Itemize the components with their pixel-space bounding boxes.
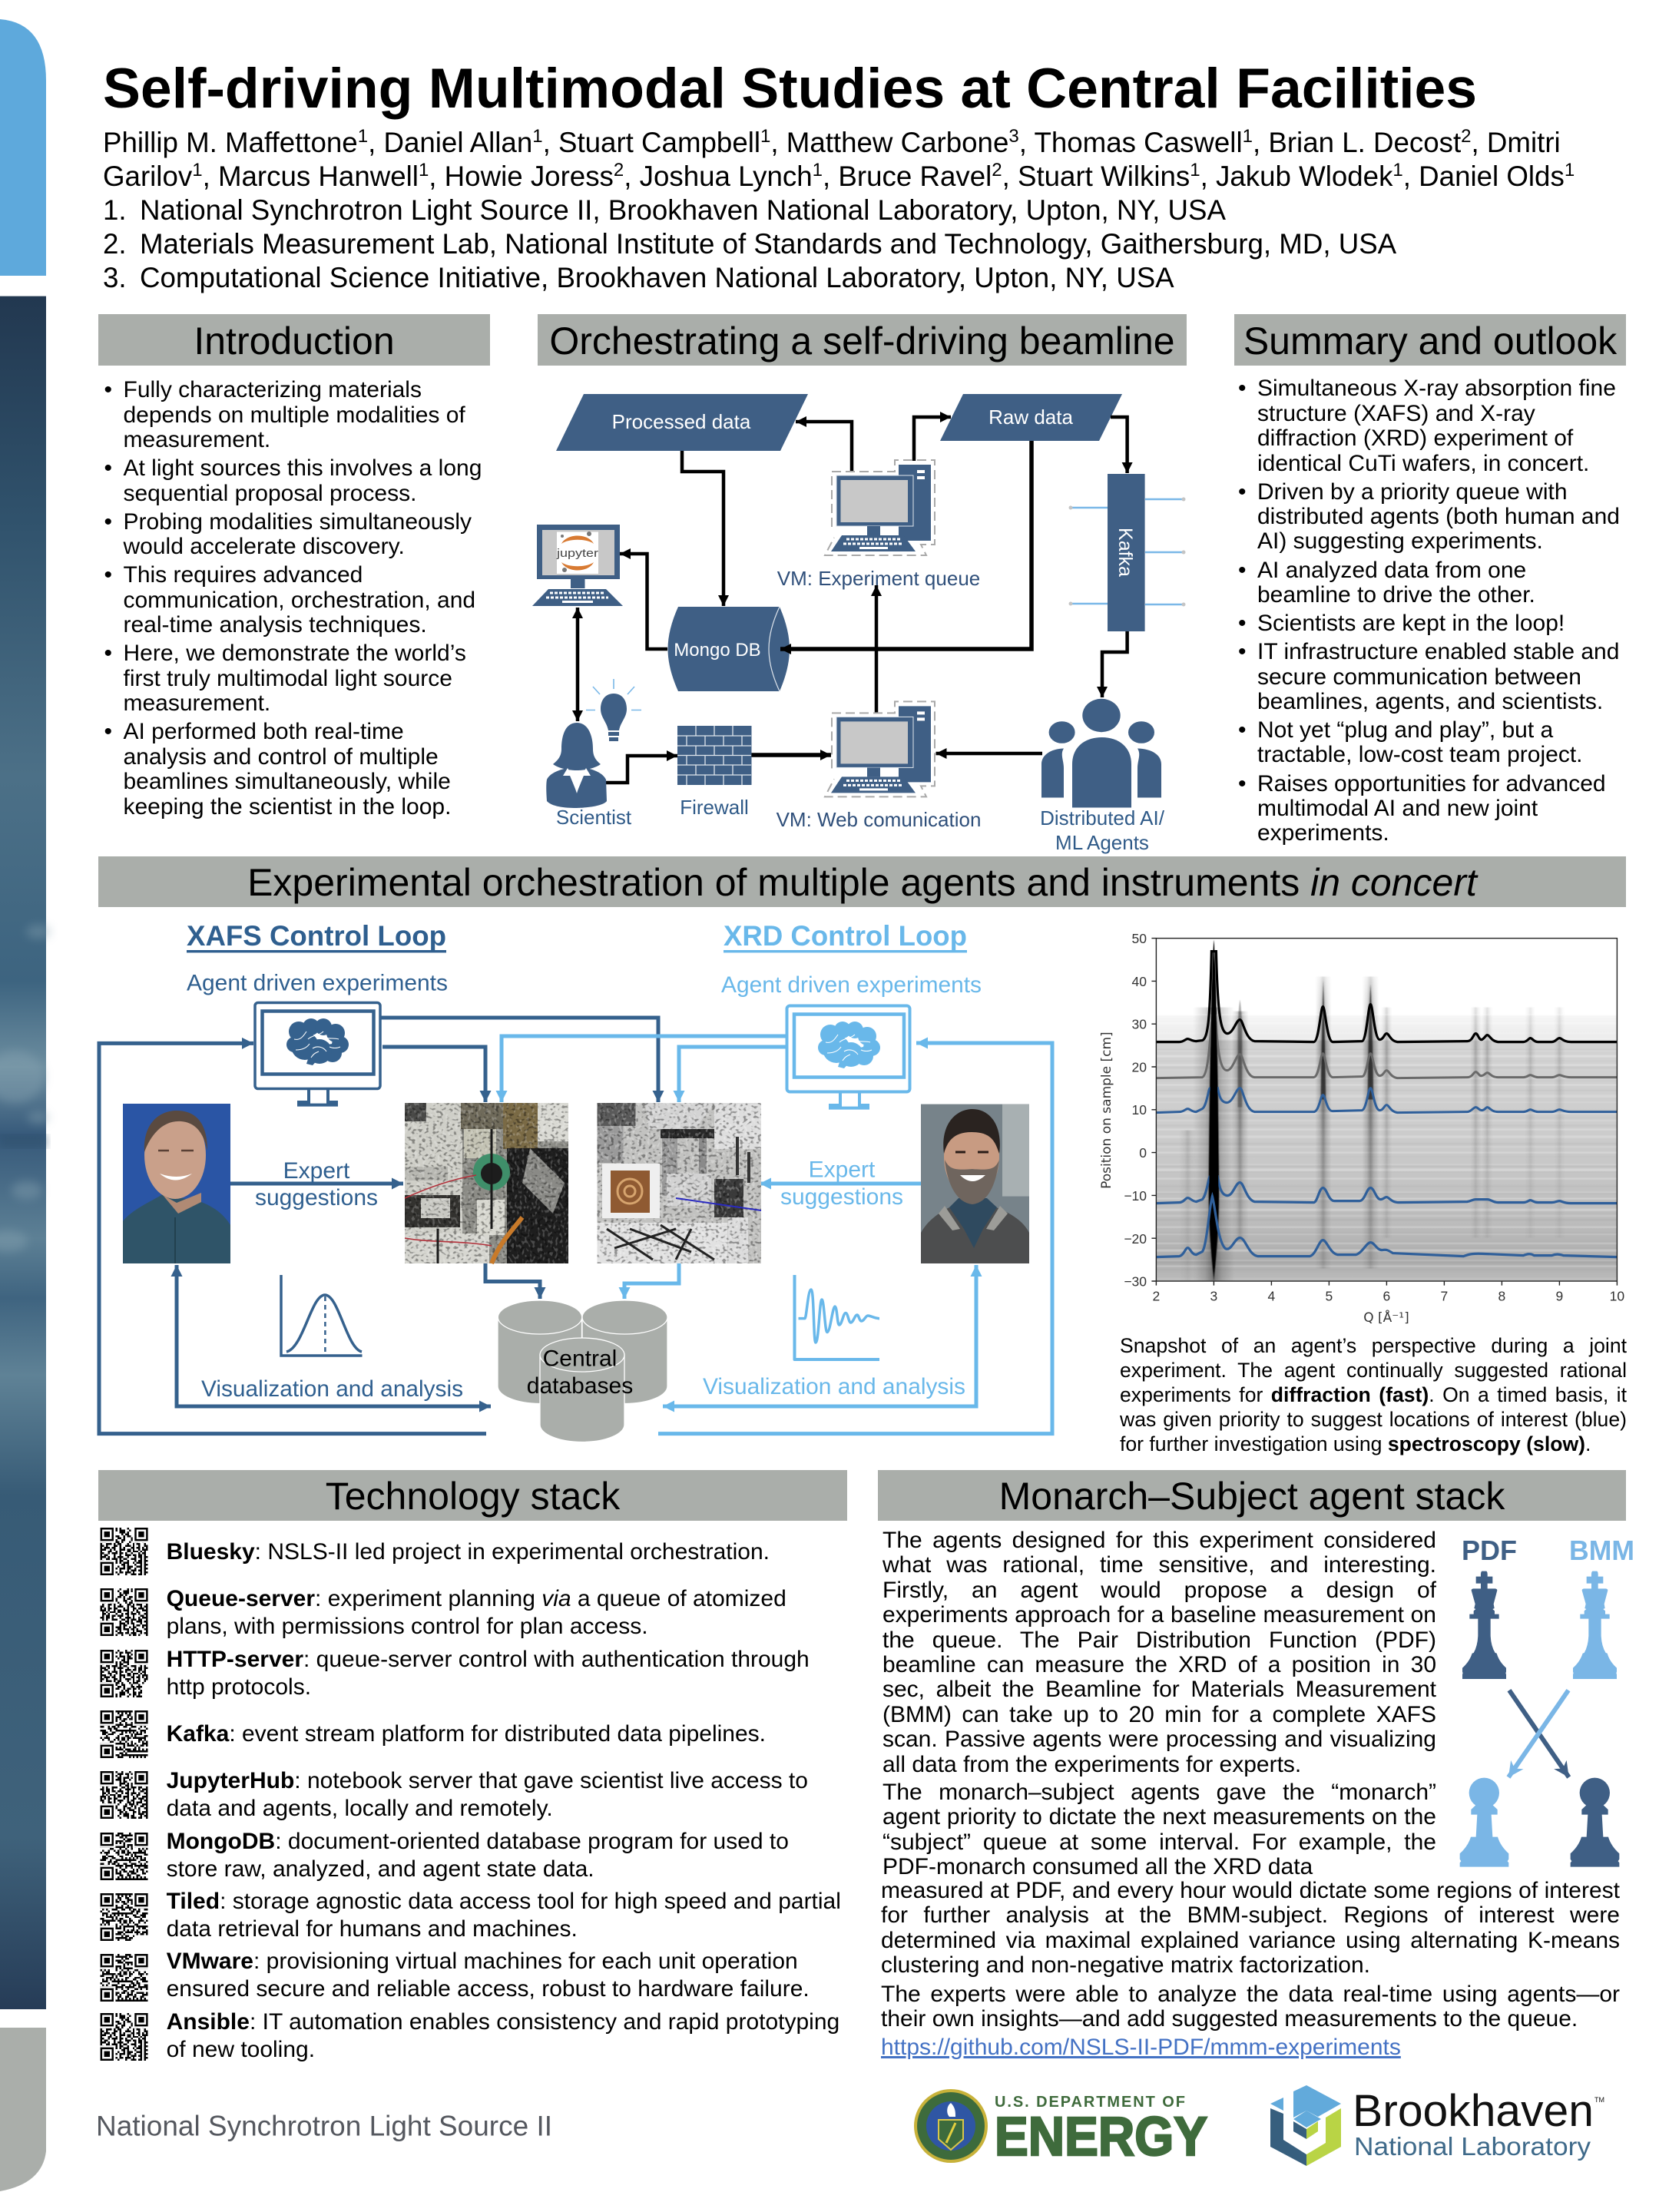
label: BMM: BMM (1569, 1535, 1634, 1566)
introduction bullet list (104, 377, 482, 820)
icon: jupyter workstation (532, 525, 623, 606)
chart: x tick labels: 10 (1610, 1289, 1624, 1304)
DOE wordmark large: ENERGY (995, 2107, 1207, 2167)
introduction bullet list: real-time analysis techniques. (123, 612, 427, 637)
chart caption: experiment. The agent continually suggested rational (1120, 1359, 1627, 1382)
National Laboratory wordmark: National Laboratory (1354, 2132, 1591, 2161)
arrow: BMM to subject (1508, 1690, 1568, 1777)
heading: XAFS control loop: XAFS Control Loop (187, 920, 446, 952)
photo: XRD instrument (598, 1103, 761, 1263)
chess graphic: monarch subject (1460, 1535, 1634, 1867)
connector arrows (578, 417, 1128, 783)
raw data node: Raw data (988, 406, 1073, 429)
chart axes frame (1151, 939, 1617, 1286)
introduction bullet list: At light sources this involves a long (123, 455, 482, 481)
monarch-subject body text: for further analysis at the BMM-subject. Regions of interest were (881, 1902, 1620, 1928)
kafka stream bus (1069, 474, 1186, 631)
heading: technology stack: Technology stack (326, 1475, 620, 1518)
text: • (1238, 611, 1247, 636)
sidebar: bottom gray tab (0, 2028, 46, 2191)
summary bullet list: diffraction (XRD) experiment of (1257, 426, 1573, 451)
QR code: Bluesky (101, 1528, 148, 1575)
label: expert suggestions right: suggestions (780, 1184, 903, 1210)
chart: y tick labels: −10 (1124, 1188, 1147, 1204)
label: web communication: VM: Web comunication (777, 808, 981, 831)
tech item: HTTP-server: http protocols. (167, 1674, 311, 1700)
heading: XRD control loop: XRD Control Loop (724, 920, 967, 952)
heading: introduction: Introduction (194, 320, 395, 363)
text: • (1238, 639, 1247, 664)
heading: technology stack (98, 1470, 847, 1521)
introduction bullet list: Here, we demonstrate the world’s (123, 641, 466, 666)
tech item: VMware: VMware: provisioning virtual machines for each unit operation (167, 1949, 798, 1974)
curve: gray trace (1156, 1023, 1617, 1078)
summary bullet list: beamline to drive the other. (1257, 582, 1535, 608)
QR code: Tiled (101, 1893, 148, 1941)
monarch-subject body text: “subject” queue at some interval. For example, the (882, 1830, 1436, 1855)
raw data node (940, 394, 1122, 441)
chart: y tick labels: 10 (1132, 1102, 1147, 1118)
monarch-subject body text: beamline can measure the XRD of a position in 30 (882, 1652, 1436, 1677)
introduction bullet list: sequential proposal process. (123, 481, 416, 506)
tech item: Ansible (167, 2009, 839, 2062)
chart: x tick labels: 2 (1153, 1289, 1160, 1304)
icon: BMM king (1573, 1571, 1617, 1679)
monarch-subject body text: determined via maximal explained variance using alternating K-means (881, 1928, 1620, 1953)
chart: x tick labels (1153, 1289, 1624, 1304)
XRD loop arrows (502, 1036, 1052, 1434)
monarch-subject body text: (BMM) can take up to 20 min for a complete XAFS (882, 1702, 1436, 1727)
heading: orchestrating a self-driving beamline: Orchestrating a self-driving beamline (549, 320, 1175, 363)
curve: blue trace 1 (1156, 1088, 1617, 1113)
monarch-subject body text: scan. Passive agents were processing and visualizing (882, 1727, 1436, 1752)
summary bullet list: AI) suggesting experiments. (1257, 528, 1543, 554)
text: • (1238, 558, 1247, 583)
photo: XAFS instrument (405, 1103, 568, 1263)
chart: x tick labels: 6 (1383, 1289, 1390, 1304)
label: distributed AI agents: ML Agents (1055, 831, 1149, 854)
chart: y tick labels: −20 (1124, 1231, 1147, 1247)
chart: y tick labels: 40 (1132, 974, 1147, 989)
introduction bullet list: Fully characterizing materials (123, 377, 422, 402)
text: • (104, 641, 112, 666)
summary bullet list (1238, 376, 1620, 846)
summary bullet list: structure (XAFS) and X-ray (1257, 401, 1535, 426)
tech item: Tiled: Tiled: storage agnostic data access tool for high speed and partial (167, 1889, 841, 1914)
chart: y tick labels: 0 (1139, 1145, 1147, 1161)
chart caption: for further investigation using spectroscopy (slow). (1120, 1432, 1591, 1455)
authors and affiliations: Phillip M. Maffettone1, Daniel Allan1, Stuart Campbell1, Matthew Carbone3, Thomas Caswell1, Brian L. Decost2, Dmitri (103, 126, 1561, 158)
chart caption (1120, 1334, 1627, 1455)
processed data node: Processed data (612, 410, 751, 433)
monarch-subject body text: what was rational, time sensitive, and interesting. (882, 1552, 1436, 1578)
summary bullet list: secure communication between (1257, 664, 1581, 690)
label: firewall: Firewall (680, 796, 749, 819)
heading: experimental orchestration (98, 856, 1626, 907)
label: expert suggestions left (255, 1158, 378, 1210)
icon: damped oscillation plot (794, 1275, 879, 1359)
label: central databases: databases (527, 1373, 633, 1399)
label: distributed AI agents: Distributed AI/ (1040, 806, 1165, 830)
chart: y tick labels: 20 (1132, 1060, 1147, 1075)
authors and affiliations (103, 126, 1575, 293)
authors and affiliations: Garilov1, Marcus Hanwell1, Howie Joress2, Joshua Lynch1, Bruce Ravel2, Stuart Wilkins1, Jakub Wlodek1, Daniel Olds1 (103, 160, 1575, 192)
text: • (1238, 376, 1247, 401)
chart: x tick labels: 5 (1326, 1289, 1333, 1304)
chart: x tick labels: 4 (1268, 1289, 1276, 1304)
tech item: Queue-server: Queue-server: experiment planning via a queue of atomized (167, 1586, 786, 1611)
monarch-subject body text: their own insights—and add suggested measurements to the queue. (881, 2006, 1578, 2032)
tech item: HTTP-server (167, 1647, 810, 1700)
Brookhaven wordmark: Brookhaven (1353, 2086, 1594, 2136)
chart caption: was given priority to suggest locations of interest (blue) (1120, 1408, 1627, 1431)
processed data node (556, 394, 808, 451)
summary bullet list: distributed agents (both human and (1257, 504, 1620, 529)
heading: introduction (98, 314, 490, 366)
chart: y axis title: Position on sample [cm] (1099, 1031, 1114, 1189)
introduction bullet list: communication, orchestration, and (123, 588, 475, 613)
text: • (1238, 717, 1247, 743)
chart caption: experiments for diffraction (fast). On a timed basis, it (1120, 1383, 1627, 1406)
summary bullet list: tractable, low-cost team project. (1257, 742, 1583, 767)
label: expert suggestions right: Expert (809, 1157, 876, 1183)
summary bullet list: identical CuTi wafers, in concert. (1257, 451, 1589, 476)
chart caption: Snapshot of an agent’s perspective during a joint (1120, 1334, 1627, 1357)
chart: x tick labels: 3 (1210, 1289, 1217, 1304)
summary bullet list: AI analyzed data from one (1257, 558, 1526, 583)
icon: central databases (498, 1300, 667, 1442)
text: • (1238, 479, 1247, 505)
icon: lightbulb (586, 679, 641, 741)
summary bullet list: Not yet “plug and play”, but a (1257, 717, 1553, 743)
QR code: HTTP-server (101, 1650, 148, 1697)
monarch-subject body text: The agents designed for this experiment considered (882, 1528, 1436, 1553)
text: • (104, 455, 112, 481)
summary bullet list: Raises opportunities for advanced (1257, 771, 1606, 796)
authors and affiliations: 1. (103, 194, 127, 226)
summary bullet list: Scientists are kept in the loop! (1257, 611, 1565, 636)
summary bullet list: Simultaneous X-ray absorption fine (1257, 376, 1616, 401)
heading: summary and outlook: Summary and outlook (1243, 320, 1617, 363)
monarch-subject body text: https://github.com/NSLS-II-PDF/mmm-experiments (881, 2034, 1401, 2060)
mongo db cylinder (668, 607, 790, 691)
summary bullet list: experiments. (1257, 820, 1389, 846)
chart: y tick labels: 30 (1132, 1017, 1147, 1032)
mongo db cylinder: Mongo DB (674, 640, 761, 661)
logo: Brookhaven National Laboratory (1270, 2085, 1604, 2166)
QR code: JupyterHub (101, 1771, 148, 1819)
label: PDF: PDF (1462, 1535, 1517, 1566)
summary bullet list: beamlines, agents, and scientists. (1257, 689, 1603, 714)
tech item: JupyterHub (167, 1768, 808, 1821)
heading: monarch-subject agent stack (878, 1470, 1626, 1521)
label: agent driven experiments right: Agent driven experiments (721, 972, 982, 998)
sidebar: dark textured strip (0, 296, 51, 2009)
tech item: MongoDB: store raw, analyzed, and agent state data. (167, 1856, 594, 1882)
monarch-subject body text: Firstly, an agent would propose a design of (882, 1578, 1436, 1603)
heading: experimental orchestration: Experimental orchestration of multiple agents and instruments in concert (247, 861, 1477, 904)
chart: diffraction waterfall (1099, 931, 1624, 1326)
monarch-subject body text: PDF-monarch consumed all the XRD data (882, 1854, 1313, 1879)
chart: y tick labels (1124, 931, 1147, 1289)
icon: experiment queue VM (825, 460, 935, 555)
monarch-subject body text: The experts were able to analyze the data real-time using agents—or (881, 1982, 1620, 2006)
chart: x axis title: Q [Å⁻¹] (1363, 1309, 1409, 1326)
curve: blue trace 2 (1156, 1177, 1617, 1204)
tech item: Kafka: Kafka: event stream platform for distributed data pipelines. (167, 1721, 766, 1747)
label: distributed AI agents (1040, 806, 1165, 854)
label: central databases (527, 1346, 633, 1399)
introduction bullet list: This requires advanced (123, 562, 363, 588)
label: expert suggestions left: Expert (283, 1158, 350, 1184)
tech item: VMware: ensured secure and reliable access, robust to hardware failure. (167, 1976, 810, 2002)
photo: XRD expert (921, 1104, 1029, 1263)
introduction bullet list: analysis and control of multiple (123, 744, 439, 770)
text: • (104, 562, 112, 588)
introduction bullet list: measurement. (123, 690, 270, 716)
label: expert suggestions right (780, 1157, 903, 1210)
icon: XAFS agent monitor (255, 1003, 380, 1105)
tech item: HTTP-server: HTTP-server: queue-server control with authentication through (167, 1647, 810, 1672)
DOE seal (914, 2089, 988, 2163)
label: scientist: Scientist (556, 806, 632, 829)
authors and affiliations: Materials Measurement Lab, National Institute of Standards and Technology, Gaithersburg, MD, USA (140, 228, 1396, 260)
icon: PDF king (1462, 1571, 1506, 1679)
chart: x tick labels: 8 (1498, 1289, 1505, 1304)
panel: orchestration flow diagram (532, 394, 1186, 854)
tech item: Queue-server: plans, with permissions control for plan access. (167, 1614, 648, 1639)
trademark: TM (1594, 2096, 1604, 2104)
footer: NSLS-II wordmark: National Synchrotron Light Source II (96, 2111, 552, 2142)
QR code: Ansible (101, 2013, 148, 2061)
label: experiment queue: VM: Experiment queue (777, 567, 980, 590)
monarch-subject body text: experiments approach for a baseline measurement on (882, 1602, 1436, 1628)
icon: firewall (677, 726, 751, 785)
QR code: VMware (101, 1954, 148, 2002)
summary bullet list: multimodal AI and new joint (1257, 796, 1538, 821)
label: agent driven experiments left: Agent driven experiments (187, 971, 448, 995)
kafka stream bus: Kafka (1114, 528, 1136, 577)
Brookhaven hexagon mark (1270, 2085, 1341, 2166)
monarch-subject body text: sec, albeit the Beamline for Materials Measurement (882, 1677, 1436, 1702)
authors and affiliations: Computational Science Initiative, Brookhaven National Laboratory, Upton, NY, USA (140, 262, 1174, 293)
QR code: MongoDB (101, 1833, 148, 1880)
monarch-subject body text: measured at PDF, and every hour would dictate some regions of interest (881, 1878, 1620, 1903)
tech item: Ansible: of new tooling. (167, 2037, 315, 2062)
monarch-subject body text: all data from the experiments for experts. (882, 1752, 1301, 1777)
introduction bullet list: beamlines simultaneously, while (123, 769, 451, 794)
introduction bullet list: first truly multimodal light source (123, 666, 452, 691)
icon: PDF pawn (1571, 1778, 1619, 1867)
text: • (104, 719, 112, 744)
QR code: Queue-server (101, 1588, 148, 1636)
chart: x tick labels: 7 (1441, 1289, 1448, 1304)
introduction bullet list: Probing modalities simultaneously (123, 509, 472, 535)
tech item: Queue-server (167, 1586, 786, 1639)
authors and affiliations: National Synchrotron Light Source II, Brookhaven National Laboratory, Upton, NY, USA (140, 194, 1226, 226)
panel: control loops diagram (99, 920, 1052, 1442)
icon: scientist (546, 723, 607, 808)
tech item: JupyterHub: JupyterHub: notebook server that gave scientist live access to (167, 1768, 808, 1793)
monarch-subject body text (881, 1528, 1630, 2066)
authors and affiliations: 2. (103, 228, 127, 260)
tech item: VMware (166, 1949, 810, 2002)
monarch-subject body text: agent priority to dictate the next measurements on the (882, 1804, 1436, 1830)
introduction bullet list: measurement. (123, 427, 270, 452)
chart: y tick labels: 50 (1132, 931, 1147, 946)
tech item: JupyterHub: data and agents, locally and remotely. (167, 1796, 553, 1821)
XAFS loop arrows (99, 1018, 658, 1434)
icon: XRD agent monitor (786, 1006, 909, 1108)
text: • (104, 377, 112, 402)
logo: Department of Energy (914, 2089, 1207, 2167)
authors and affiliations: 3. (103, 262, 127, 293)
monarch-subject body text: the queue. The Pair Distribution Function (PDF) (882, 1628, 1436, 1653)
sidebar: top blue tab (0, 19, 46, 276)
curve: blue trace 3 (1156, 1197, 1617, 1257)
chart: y tick labels: −30 (1124, 1273, 1147, 1289)
QR code: Kafka (101, 1710, 148, 1758)
label: central databases: Central (543, 1346, 617, 1371)
summary bullet list: Driven by a priority queue with (1257, 479, 1568, 505)
label: visualization and analysis left: Visualization and analysis (201, 1376, 463, 1402)
summary bullet list: IT infrastructure enabled stable and (1257, 639, 1619, 664)
tech item: Tiled (166, 1889, 841, 1942)
tech item: MongoDB (167, 1829, 789, 1882)
introduction bullet list: would accelerate discovery. (123, 534, 405, 559)
icon: gaussian plot (281, 1275, 363, 1356)
peak core over traces (1209, 940, 1218, 1192)
DOE wordmark small: U.S. DEPARTMENT OF (995, 2094, 1185, 2111)
QR codes column (101, 1528, 148, 2061)
curve: top black trace (1156, 952, 1617, 1042)
icon: web communication VM (825, 701, 935, 796)
tech item: Ansible: Ansible: IT automation enables consistency and rapid prototyping (167, 2009, 839, 2035)
label: visualization and analysis right: Visualization and analysis (703, 1374, 965, 1399)
introduction bullet list: AI performed both real-time (123, 719, 404, 744)
label: expert suggestions left: suggestions (255, 1185, 378, 1210)
monarch-subject body text: The monarch–subject agents gave the “monarch” (882, 1780, 1436, 1805)
tech item: Bluesky: Bluesky: NSLS-II led project in experimental orchestration. (167, 1539, 770, 1565)
introduction bullet list: depends on multiple modalities of (123, 402, 465, 428)
monarch-subject body text: clustering and non-negative matrix factorization. (881, 1952, 1370, 1978)
arrow: PDF to subject (1509, 1690, 1569, 1777)
text: • (1238, 771, 1247, 796)
title: Self-driving Multimodal Studies at Central Facilities (103, 57, 1477, 120)
text: • (104, 509, 112, 535)
icon: jupyter workstation: jupyter (556, 547, 598, 560)
icon: BMM pawn (1460, 1778, 1508, 1867)
introduction bullet list: keeping the scientist in the loop. (123, 794, 451, 820)
icon: distributed agents (1041, 699, 1161, 808)
heading: monarch-subject agent stack: Monarch–Subject agent stack (999, 1475, 1505, 1518)
photo: XAFS expert (123, 1104, 230, 1263)
chart: x tick labels: 9 (1556, 1289, 1563, 1304)
tech item: Tiled: data retrieval for humans and machines. (167, 1916, 578, 1942)
tech item: MongoDB: MongoDB: document-oriented database program for used to (167, 1829, 789, 1854)
